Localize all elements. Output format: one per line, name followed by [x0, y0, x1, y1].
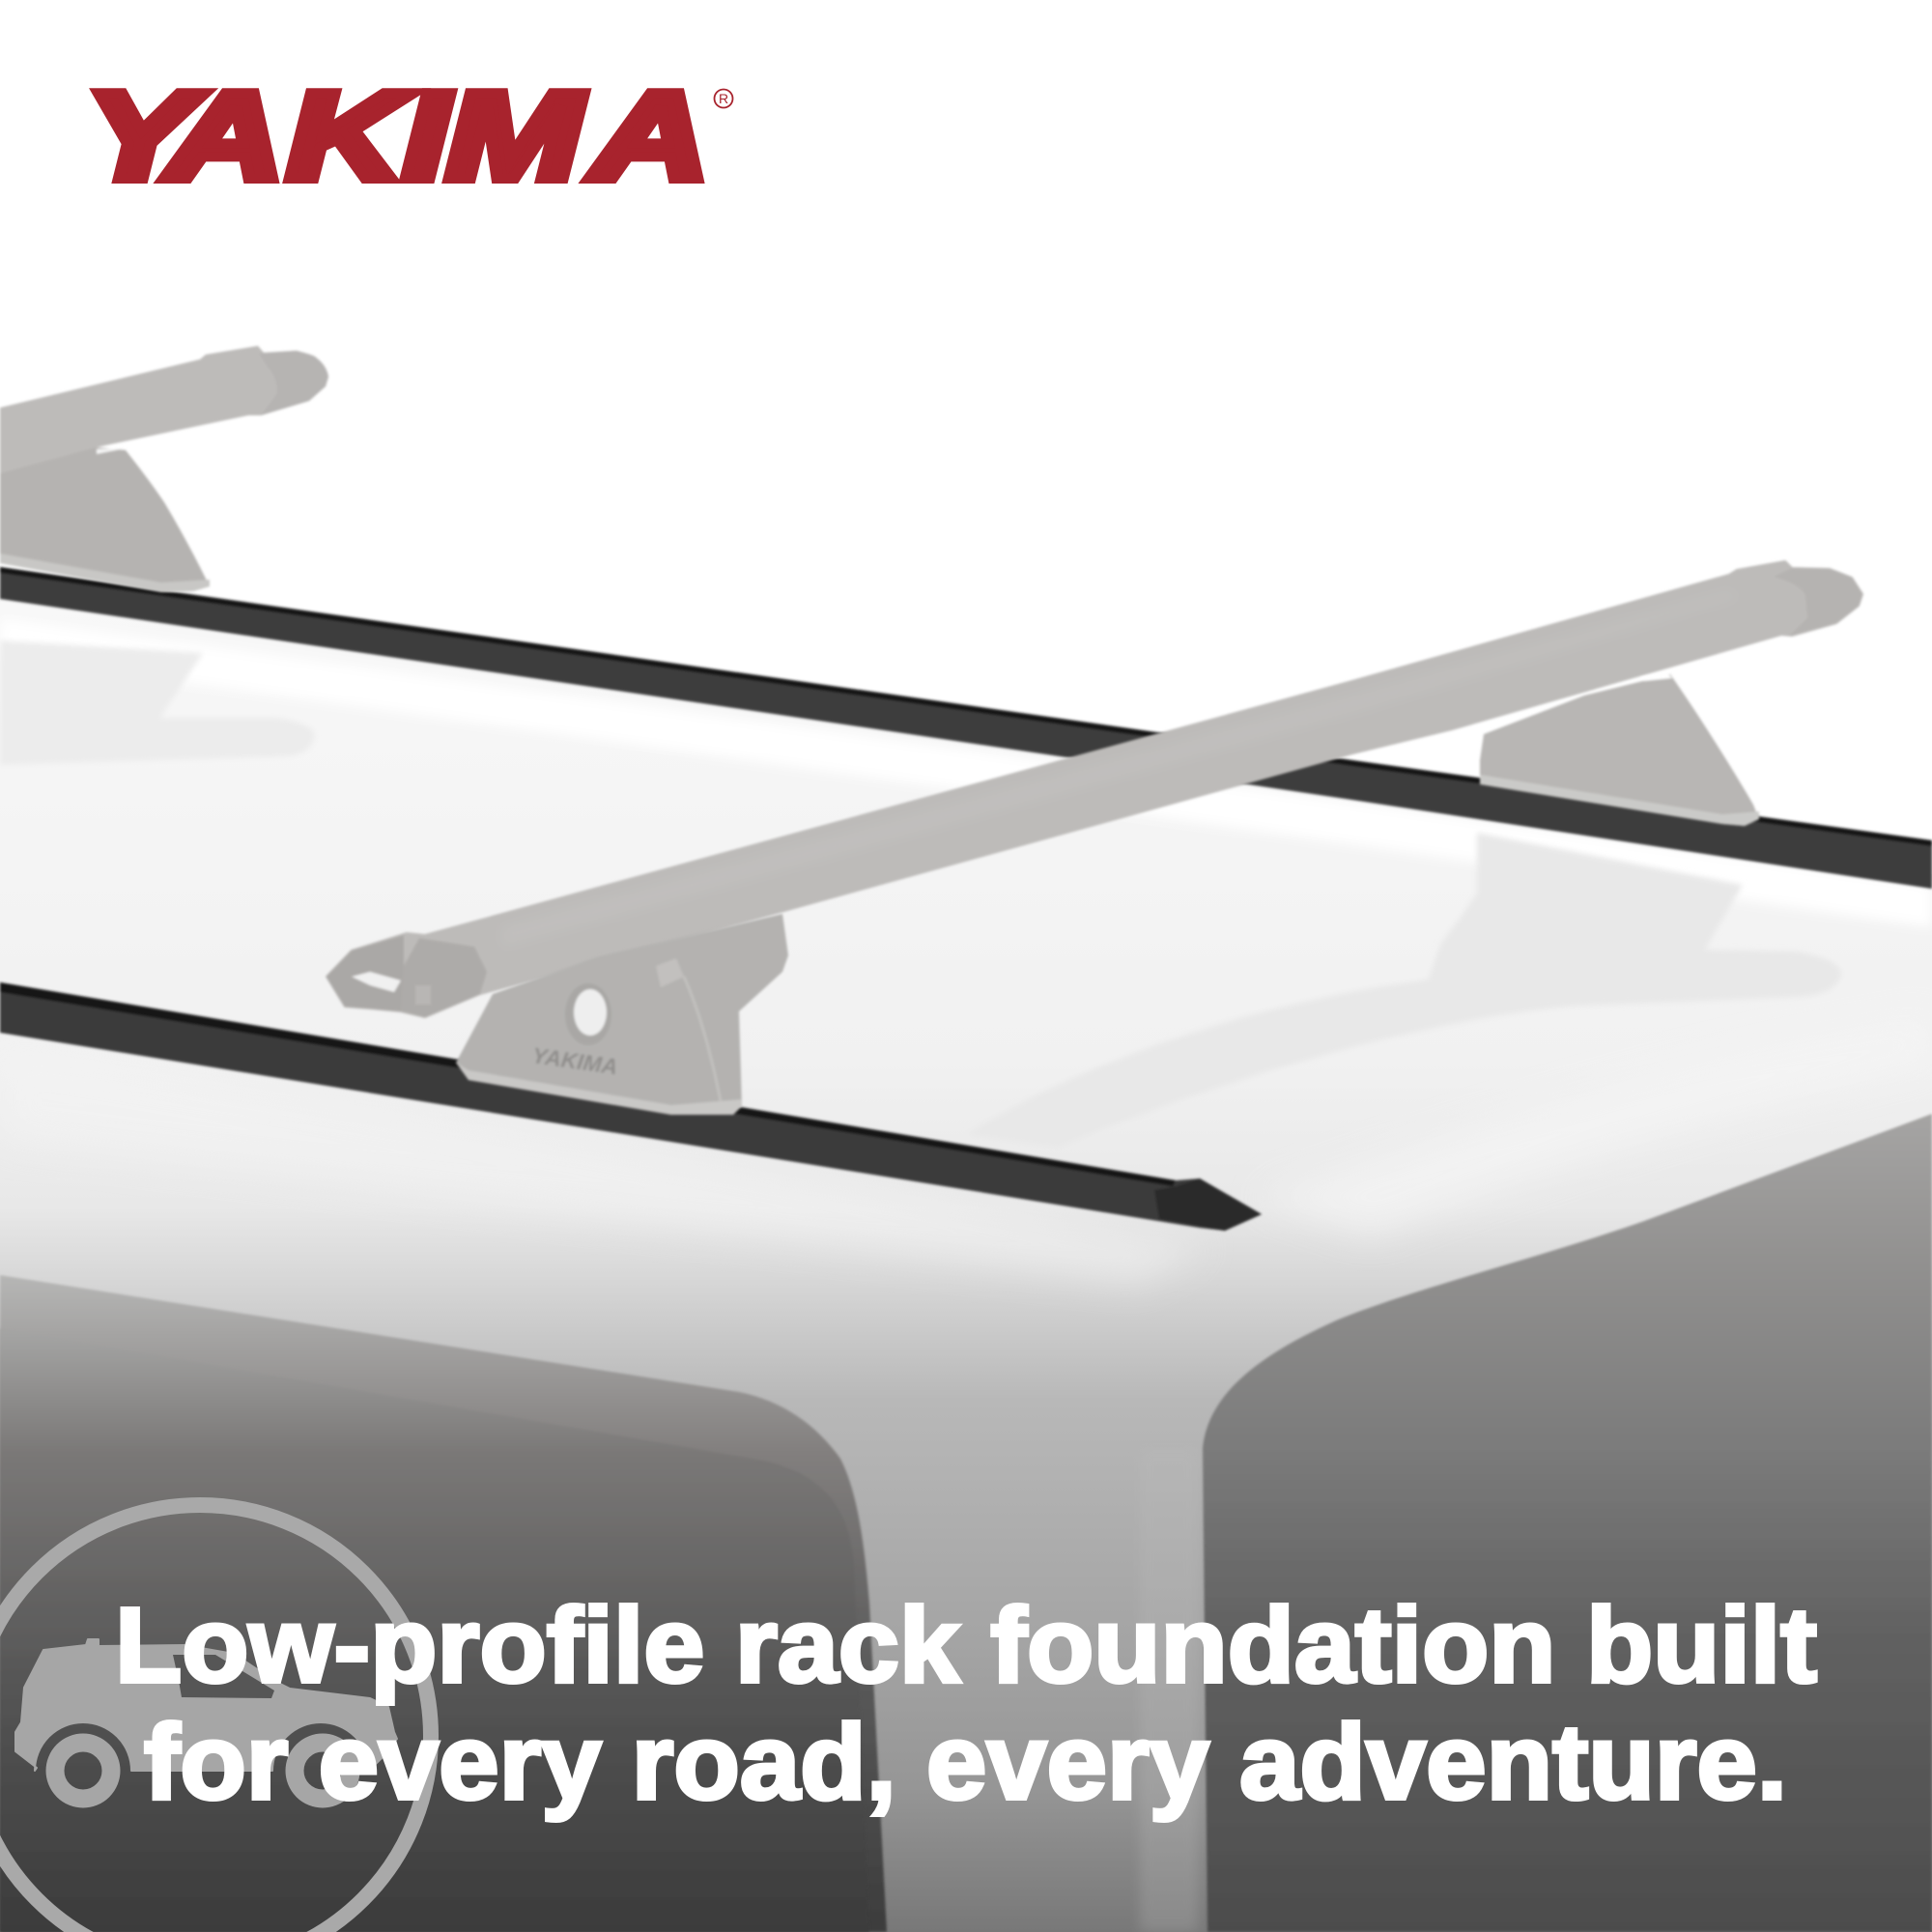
roof reflections: [0, 618, 1932, 1932]
tower bolt: [574, 989, 607, 1036]
bar end slot: [352, 972, 401, 992]
rear tower lip: [0, 554, 210, 592]
tower edge line: [684, 977, 721, 1101]
registered mark: R: [719, 91, 728, 106]
front crossbar: [327, 561, 1862, 1017]
headline line 1: Low-profile rack foundation built: [115, 1586, 1817, 1705]
near bar cap: [401, 938, 487, 1017]
tower logo text: YAKIMA: [530, 1042, 619, 1079]
bar end loop: [327, 935, 404, 1011]
rear side panel: [1203, 1114, 1932, 1932]
bar cap square: [415, 985, 431, 1005]
bar highlight: [502, 591, 1739, 947]
rear crossbar: [0, 346, 328, 473]
side window inner glass: [0, 1328, 869, 1932]
headline line 2: for every road, every adventure.: [144, 1703, 1787, 1822]
far tower slit: [1640, 674, 1672, 681]
logo wordmark: YAKIMA: [85, 67, 709, 206]
front roof rail: [0, 982, 1262, 1231]
rear roof rail: [0, 567, 1932, 889]
rear crossbar and tower: [0, 346, 328, 592]
vehicle roof photo: [0, 589, 1932, 1932]
rear bar cap: [259, 351, 328, 415]
icon: vehicle in circle: [0, 1505, 431, 1932]
icon front wheel: [55, 1743, 111, 1799]
far tower foot: [1480, 674, 1759, 826]
side window panel: [0, 1275, 887, 1932]
icon ring: [0, 1505, 431, 1932]
tower bolt ring: [565, 983, 611, 1045]
icon car window: [173, 1655, 274, 1698]
rear tower: [0, 447, 210, 592]
vehicle body: [0, 589, 1932, 1932]
logo: Yakima: [85, 67, 732, 206]
tower square: [656, 958, 684, 987]
headline: [115, 1586, 1817, 1822]
registered mark: [715, 89, 732, 108]
far bar cap: [1774, 568, 1862, 636]
front tower foot: [456, 914, 788, 1115]
rear bar slit: [97, 448, 126, 454]
icon rear wheel: [295, 1743, 351, 1799]
tower lip: [456, 1063, 742, 1115]
icon car body: [15, 1639, 397, 1771]
far tower lip: [1480, 775, 1759, 826]
